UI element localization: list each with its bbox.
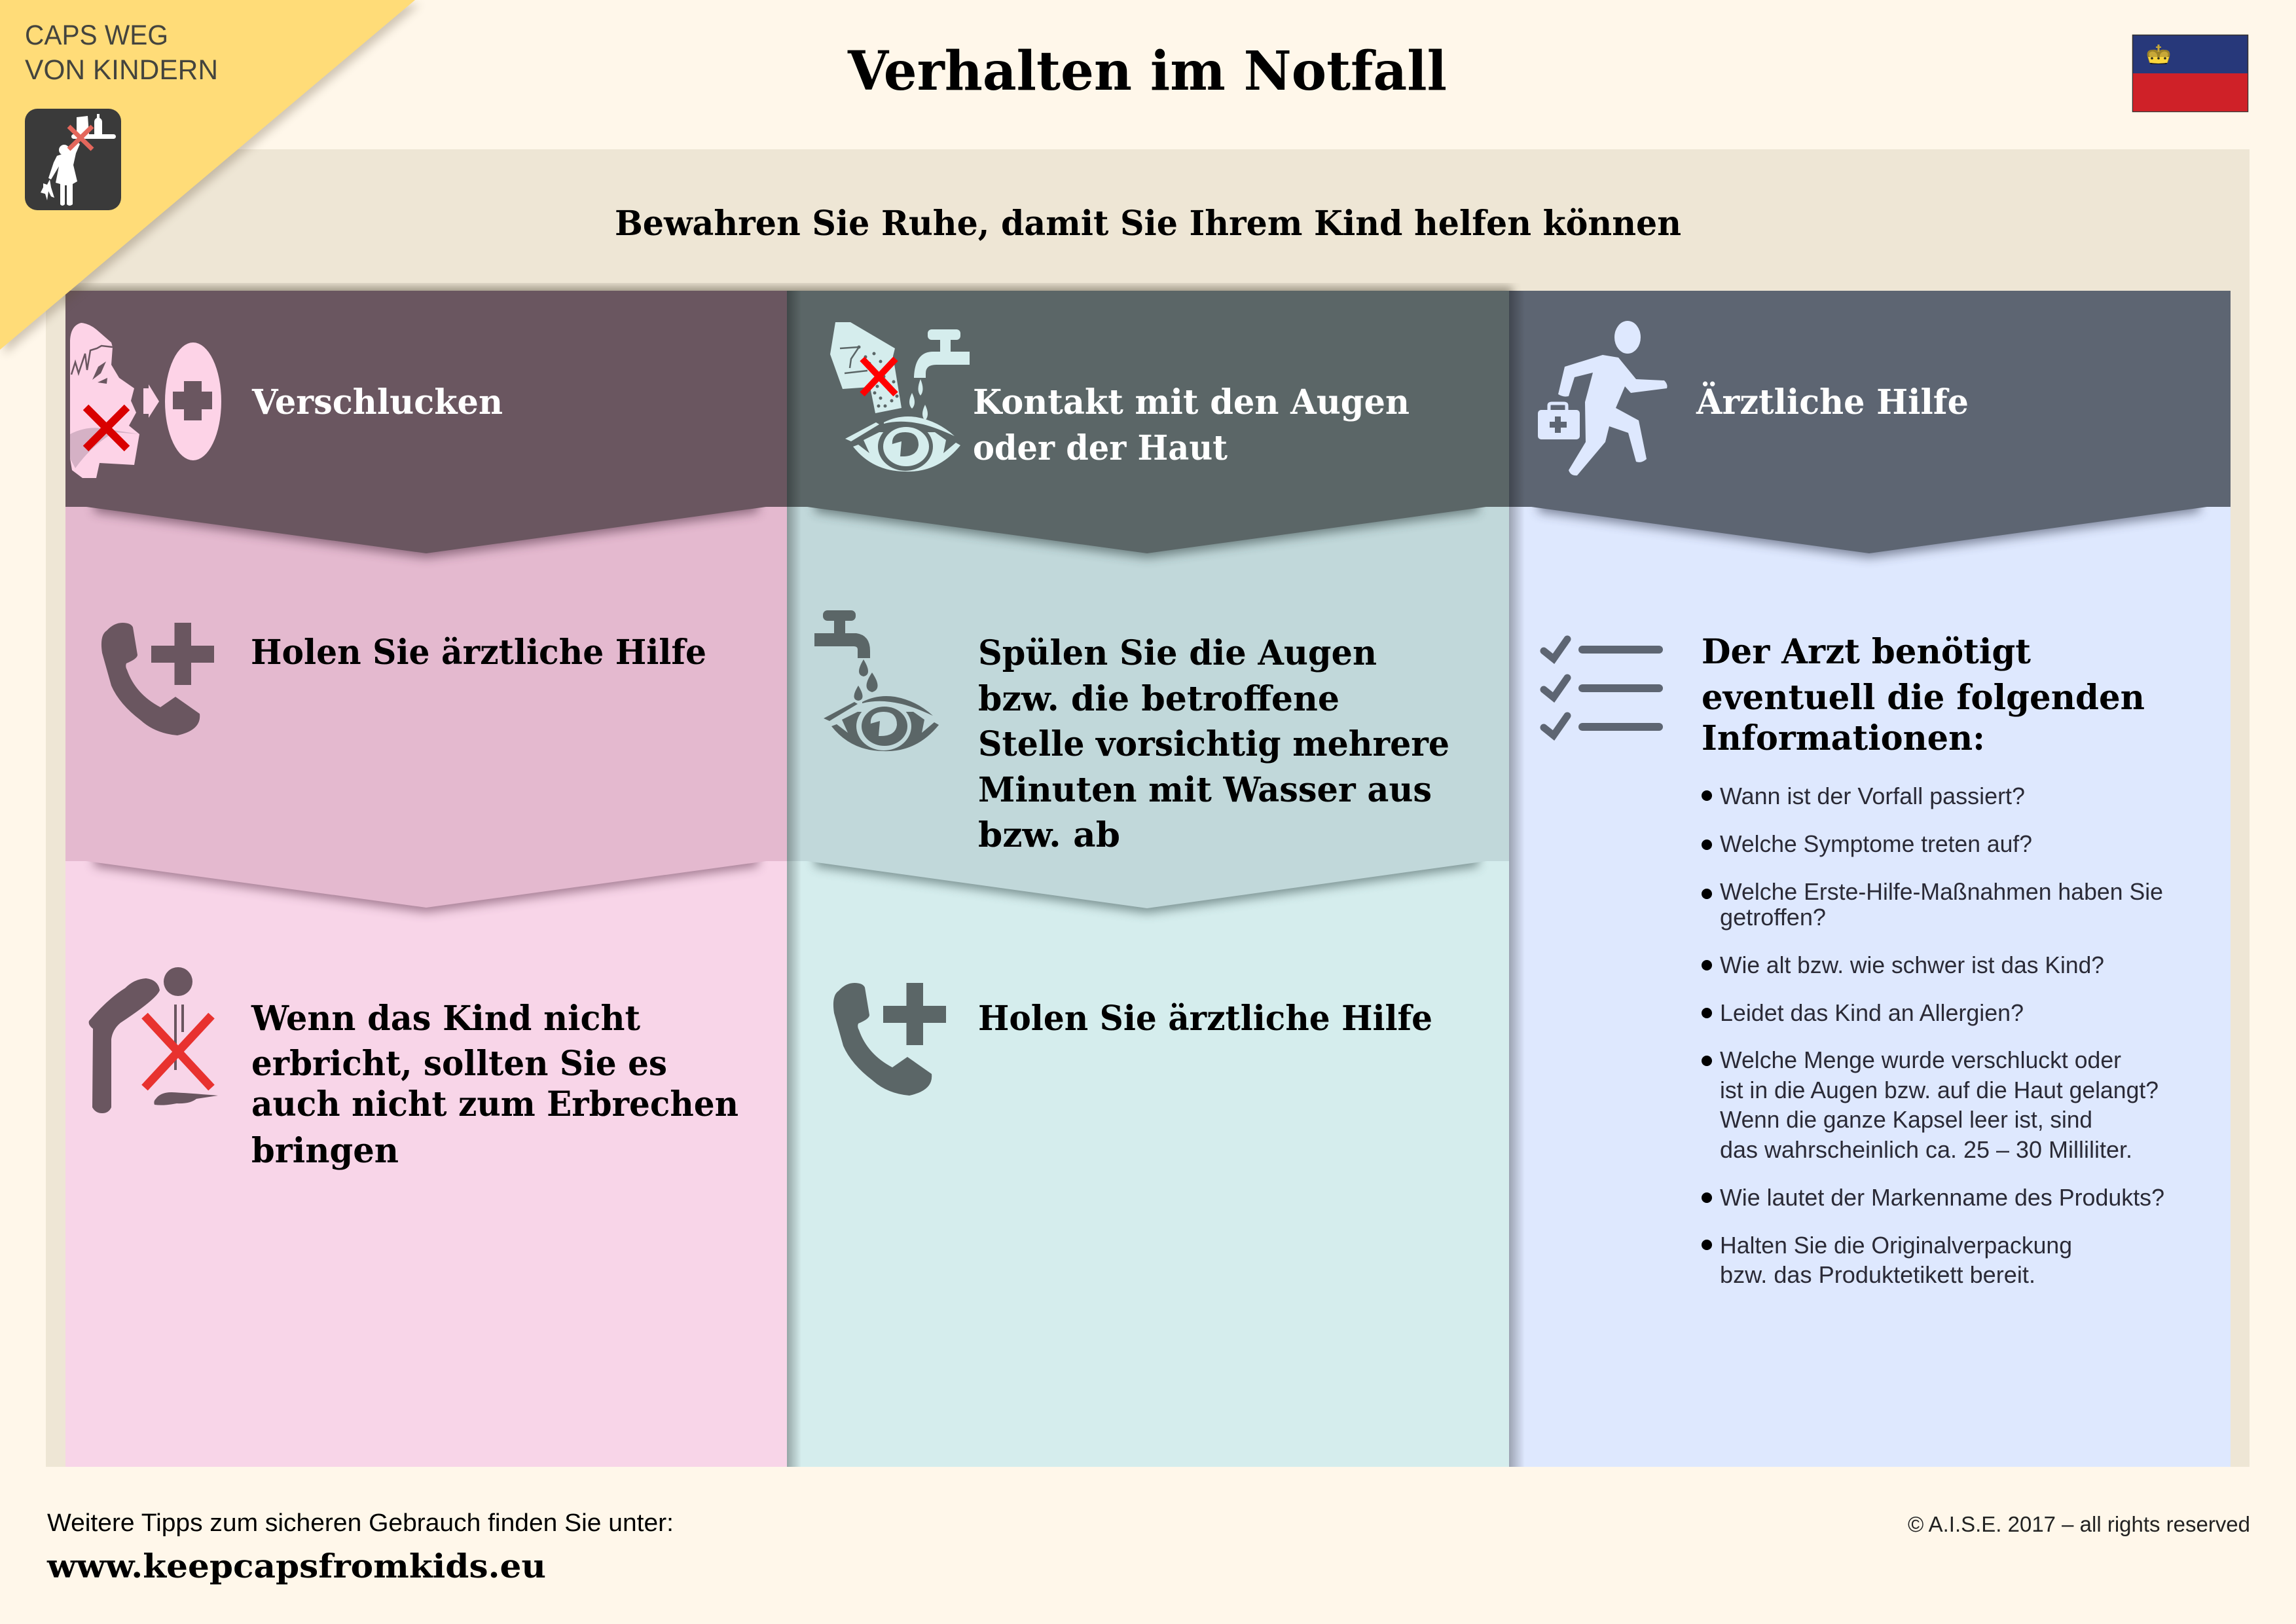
list: questions for the doctor: Wie lautet der Markenname des Produkts? — [1720, 1184, 2164, 1211]
text: Spülen Sie die Augen: Spülen Sie die Augen — [978, 633, 1377, 673]
panel: main background — [46, 149, 2250, 1467]
text: Wenn das Kind nicht — [251, 999, 738, 1171]
heading: Kontakt mit den Augen oder der Haut: Kontakt mit den Augen — [973, 382, 1410, 422]
list: questions for the doctor: Welche Menge wurde verschluckt oder — [1720, 1046, 2121, 1073]
list: questions for the doctor — [1702, 783, 2164, 1288]
corner banner — [0, 0, 415, 350]
heading: Ärztliche Hilfe: Ärztliche Hilfe — [1696, 381, 1969, 422]
list: questions for the doctor: Welche Symptome treten auf? — [1720, 830, 2032, 857]
list: questions for the doctor: getroffen? — [1720, 904, 1826, 931]
list: questions for the doctor: das wahrscheinlich ca. 25 – 30 Milliliter. — [1720, 1136, 2132, 1163]
footer: more tips: www.keepcapsfromkids.eu — [46, 1547, 546, 1585]
list: questions for the doctor: bzw. das Produktetikett bereit. — [1720, 1261, 2035, 1288]
column 1 middle band — [65, 507, 787, 908]
text: Spülen Sie die Augen: bzw. die betroffene — [978, 679, 1339, 719]
footer: more tips — [46, 1509, 674, 1585]
list: questions for the doctor: ist in die Augen bzw. auf die Haut gelangt? — [1720, 1077, 2159, 1103]
heading: Kontakt mit den Augen oder der Haut — [973, 382, 1410, 468]
text: Holen Sie ärztliche Hilfe (Verschlucken): Holen Sie ärztliche Hilfe — [251, 633, 706, 673]
text: Wenn das Kind nicht: erbricht, sollten Sie es — [251, 1044, 667, 1084]
text: Wenn das Kind nicht: Wenn das Kind nicht — [251, 999, 640, 1039]
icon: swallowing face — [70, 323, 221, 478]
list: questions for the doctor: Leidet das Kind an Allergien? — [1720, 999, 2024, 1026]
heading: Kontakt mit den Augen oder der Haut: oder der Haut — [973, 428, 1228, 468]
icon: crown — [2147, 45, 2170, 64]
text: Der Arzt benötigt: Informationen: — [1702, 718, 1985, 758]
list: questions for the doctor: Wie alt bzw. wie schwer ist das Kind? — [1720, 951, 2104, 978]
panel: column 2 Kontakt — [787, 291, 1509, 1467]
heading: Verschlucken: Verschlucken — [251, 382, 503, 422]
footer: copyright: © A.I.S.E. 2017 – all rights reserved — [1908, 1512, 2250, 1536]
icon: phone with cross (column 2) — [833, 983, 946, 1096]
brand text — [25, 20, 218, 86]
list: questions for the doctor: Wann ist der Vorfall passiert? — [1720, 783, 2025, 809]
icon: tap rinsing eye — [814, 610, 939, 751]
text: Spülen Sie die Augen: bzw. ab — [978, 815, 1120, 855]
brand text: VON KINDERN — [25, 54, 218, 86]
column 1 header — [65, 291, 787, 553]
flag: Liechtenstein — [2133, 35, 2248, 111]
text: Spülen Sie die Augen: Stelle vorsichtig mehrere — [978, 724, 1449, 764]
panel: column 3 Ärztliche Hilfe — [1509, 291, 2231, 1467]
panel: column 1 Verschlucken — [65, 291, 787, 1467]
text: Wenn das Kind nicht: bringen — [251, 1131, 399, 1171]
text: Spülen Sie die Augen — [978, 633, 1449, 855]
text: Der Arzt benötigt — [1702, 632, 2145, 758]
title: Verhalten im Notfall — [847, 40, 1447, 103]
list: questions for the doctor: Welche Erste-Hilfe-Maßnahmen haben Sie — [1720, 878, 2163, 905]
footer: more tips: Weitere Tipps zum sicheren Gebrauch finden Sie unter: — [47, 1509, 674, 1537]
icon: checklist — [1544, 639, 1659, 735]
column 3 header — [1509, 291, 2231, 553]
icon: runner with first-aid case — [1538, 321, 1667, 475]
brand text: CAPS WEG — [25, 20, 168, 51]
column 2 middle band — [787, 507, 1509, 908]
text: Wenn das Kind nicht: auch nicht zum Erbrechen — [251, 1084, 738, 1124]
text: Spülen Sie die Augen: Minuten mit Wasser aus — [978, 770, 1432, 810]
list: questions for the doctor: Halten Sie die Originalverpackung — [1720, 1232, 2072, 1259]
icon: vomiting prohibited — [89, 967, 218, 1113]
icon: capsule, tap and eye — [830, 322, 970, 471]
icon: phone with cross (column 1) — [101, 623, 214, 735]
text: Der Arzt benötigt: Der Arzt benötigt — [1702, 632, 2031, 672]
text: Der Arzt benötigt: eventuell die folgenden — [1702, 678, 2145, 718]
subtitle: Bewahren Sie Ruhe, damit Sie Ihrem Kind helfen können — [615, 204, 1681, 244]
text: Holen Sie ärztliche Hilfe (Kontakt): Holen Sie ärztliche Hilfe — [978, 999, 1432, 1039]
icon: child reaching for shelf — [25, 109, 121, 210]
list: questions for the doctor: Wenn die ganze Kapsel leer ist, sind — [1720, 1106, 2092, 1133]
column 2 header — [787, 291, 1509, 553]
